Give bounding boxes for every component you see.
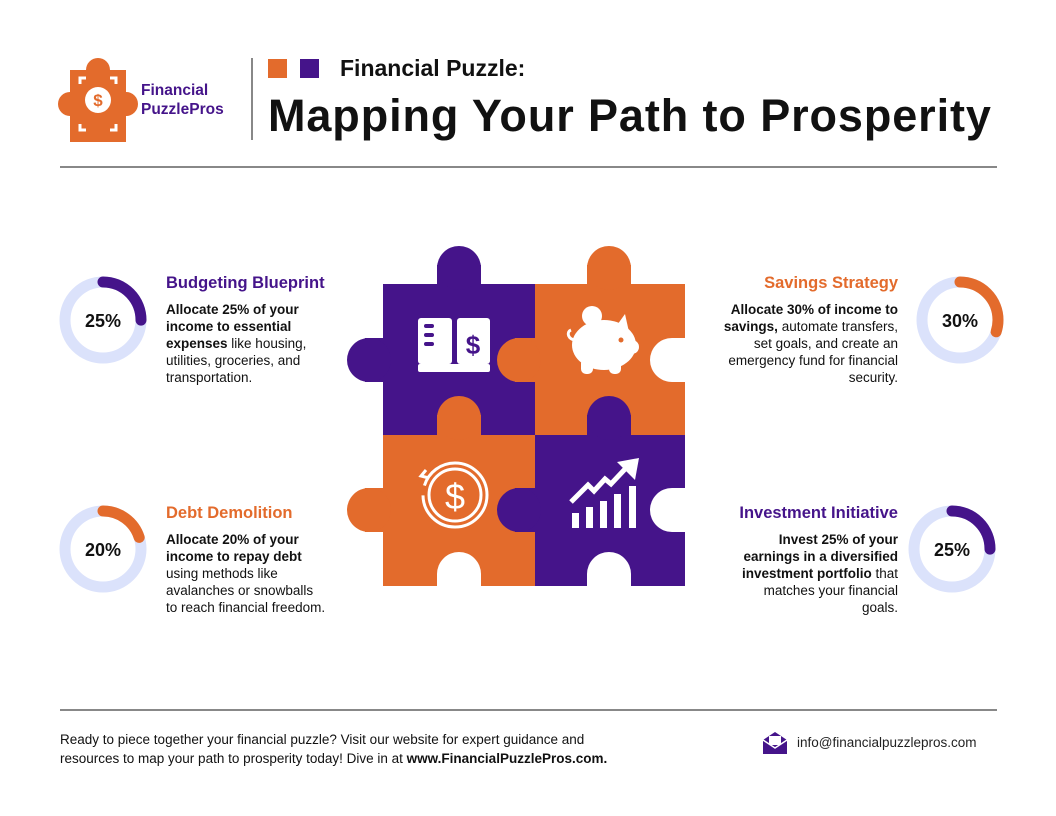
icon: debt coin: $ [445,476,465,517]
subtitle: Financial Puzzle: [340,55,525,81]
logo [58,58,224,142]
panel: savings: security. [849,370,898,385]
panel: debt: Debt Demolition [166,504,292,522]
icon: budget book [418,318,490,372]
color squares [268,59,319,78]
panel: budgeting: expenses like housing, [166,336,306,351]
icon: budget book: $ [466,330,481,360]
BR purple [535,435,685,586]
puzzle: 30% [942,311,978,331]
footer text [60,732,607,766]
contact email [763,732,977,754]
footer text: resources to map your path to prosperity today! Dive in at www.FinancialPuzzlePros.com. [60,751,607,766]
panel: investment: Investment Initiative [739,504,898,522]
panel: debt: income to repay debt [166,549,302,564]
panel: budgeting: income to essential [166,319,291,334]
panel: savings: set goals, and create an [754,336,898,351]
title: Mapping Your Path to Prosperity [268,90,992,141]
divider [251,58,253,140]
panel: budgeting: transportation. [166,370,252,385]
panel: investment: matches your financial [764,583,898,598]
icon: growth chart [571,458,639,528]
panel: debt: to reach financial freedom. [166,600,325,615]
panel: investment: Invest 25% of your [779,532,898,547]
BL orange [383,435,535,586]
donuts [65,282,998,587]
panel: savings: Savings Strategy [764,274,898,292]
icon: piggy bank [568,306,639,374]
panel: investment [739,504,898,615]
TR orange [535,284,685,435]
panel: debt: using methods like [166,566,278,581]
panel: investment: investment portfolio that [742,566,898,581]
panel: savings: Allocate 30% of income to [731,302,898,317]
logo: $ [93,91,103,110]
panel: investment: goals. [862,600,898,615]
panel: debt [166,504,325,615]
logo: Financial [141,82,208,99]
icon: debt coin [421,463,487,527]
panel: savings: emergency fund for financial [728,353,898,368]
panel: savings [724,274,898,385]
panel: budgeting [166,274,325,385]
panel: budgeting: Budgeting Blueprint [166,274,325,292]
logo: PuzzlePros [141,101,224,118]
puzzle: 25% [85,311,121,331]
panel: debt: avalanches or snowballs [166,583,313,598]
panel: savings: savings, automate transfers, [724,319,898,334]
contact email: info@financialpuzzlepros.com [797,735,977,750]
panel: budgeting: utilities, groceries, and [166,353,300,368]
panel: investment: earnings in a diversified [743,549,898,564]
footer text: Ready to piece together your financial puzzle? Visit our website for expert guidance and [60,732,584,747]
puzzle: 25% [934,540,970,560]
panel: budgeting: Allocate 25% of your [166,302,299,317]
panel: debt: Allocate 20% of your [166,532,299,547]
TL piece purple [383,284,535,435]
puzzle: 20% [85,540,121,560]
